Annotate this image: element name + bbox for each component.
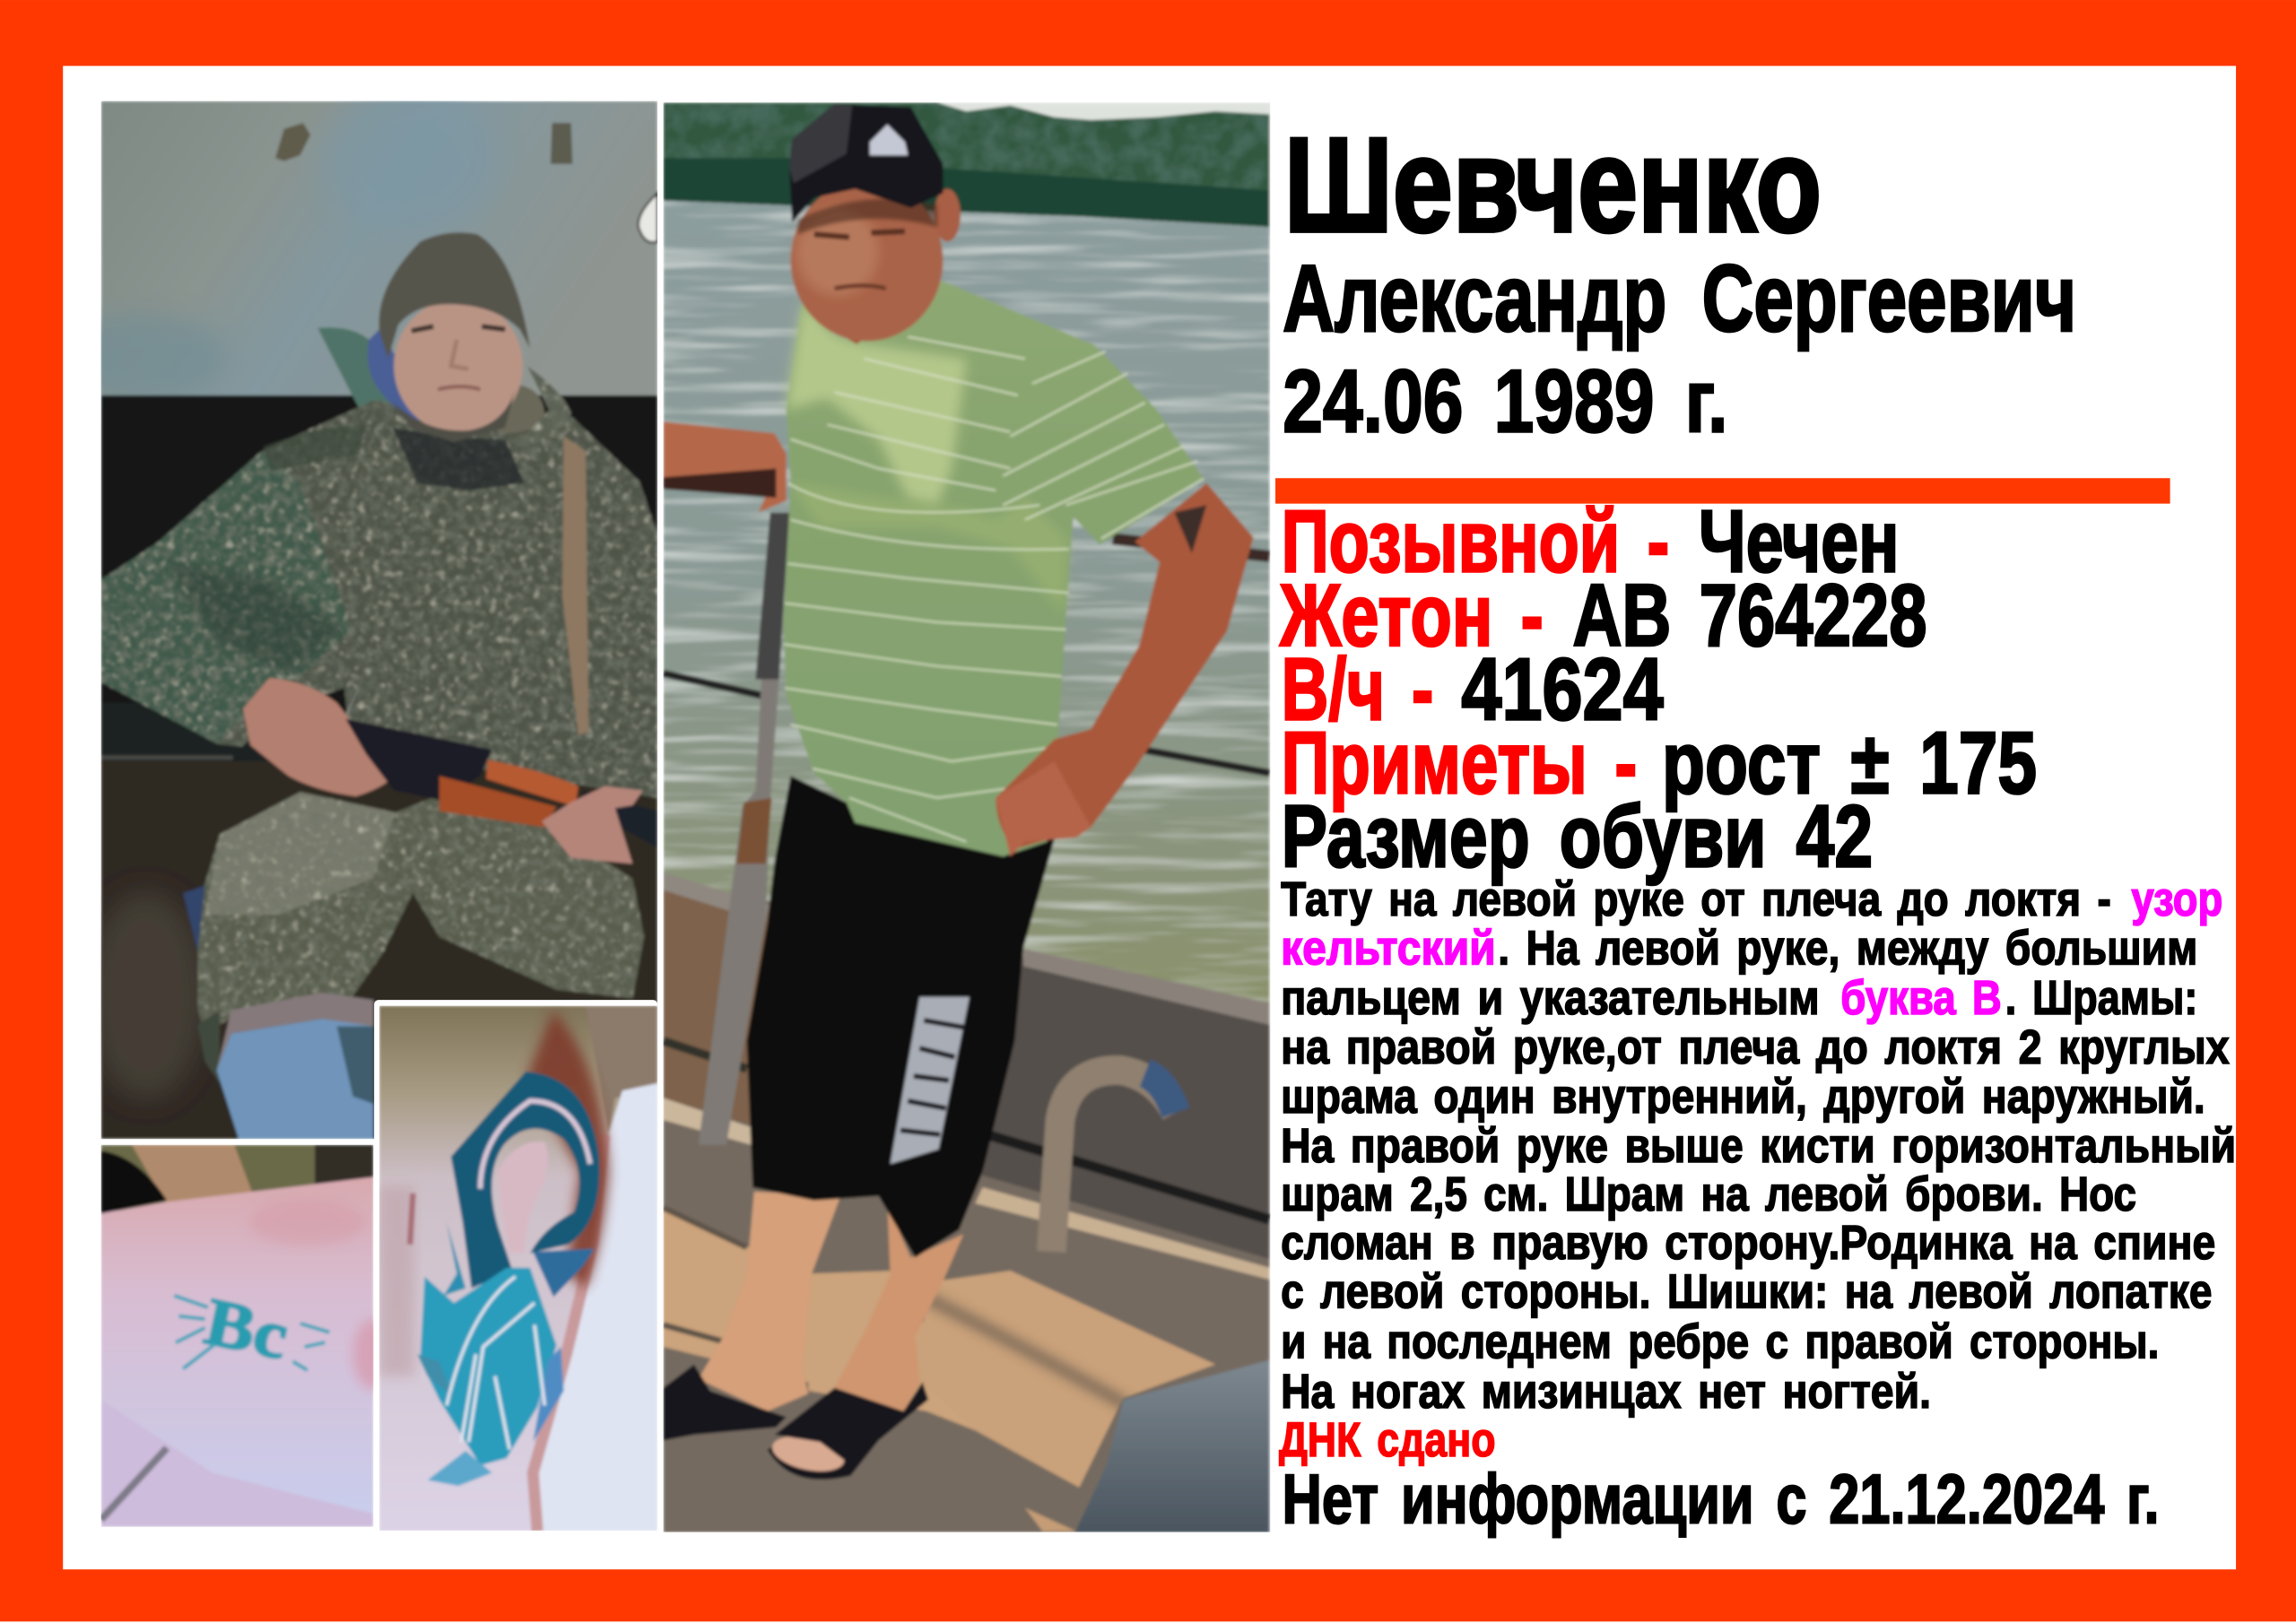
right arm and hand [996,483,1254,849]
details: military unit: В/ч - [1282,640,1433,739]
grey block foreground [1074,1360,1270,1532]
shirt stripes [783,337,1204,842]
sandals [664,1365,787,1441]
shirt [783,281,1204,856]
details: dog tag: АВ 764228 [1572,566,1927,664]
description: tattoos, scars and marks: кельтский [1281,921,1496,975]
deck base [664,879,1270,1532]
description: tattoos, scars and marks: пальцем и указательным [1281,971,1820,1025]
photo: soldier in camouflage with rifle [51,88,657,1139]
description: tattoos, scars and marks: На ногах мизинцах нет ногтей. [1281,1365,1931,1419]
details: features and height: рост ± 175 [1662,713,2037,812]
details: dog tag: Жетон - [1279,566,1544,664]
pipe [1051,1070,1176,1252]
details: shoe size: Размер обуви 42 [1282,787,1873,886]
tattoo letters: Вс [199,1284,294,1374]
details: military unit [1282,640,1664,739]
details: features and height: Приметы - [1282,713,1637,812]
description: tattoos, scars and marks: узор [2131,872,2222,926]
water [664,201,1270,1025]
photo frame: large tattoo [374,1000,657,1532]
note: DNA submitted: ДНК сдано [1279,1413,1496,1467]
post [698,678,779,1146]
details: dog tag [1279,566,1927,664]
date of birth: 24.06 1989 г. [1283,352,1728,452]
photo: man in striped t-shirt on a boat [664,102,1271,1532]
bulwark wall left [664,875,769,1130]
jacket [216,400,657,800]
description: tattoos, scars and marks: Тату на левой руке от плеча до локтя - [1281,872,2111,926]
description: tattoos, scars and marks: . На левой руке, между большим [1498,921,2197,975]
description: tattoos, scars and marks: . Шрамы: [2005,971,2197,1025]
heading: surname: Шевченко [1284,109,1822,260]
bulwark wall right [983,959,1270,1259]
sunlit deck [664,1210,811,1384]
details: call sign: Чечен [1699,492,1900,591]
right hand on rifle [243,678,394,796]
description: tattoos, scars and marks: шрам 2,5 см. Шрам на левой брови. Нос [1281,1167,2136,1221]
tattoo white stripes [447,1277,544,1449]
left arm and handrail [664,421,787,512]
description: tattoos, scars and marks: буква В [1840,971,2002,1025]
left hand [542,786,643,864]
divider bar [1275,478,2170,504]
railings [664,673,761,696]
tree line [664,102,1270,194]
tattoo lower wings [421,1268,556,1465]
tattoo top swirl [451,1072,599,1289]
description: tattoos, scars and marks [1281,872,2236,1419]
boot [217,993,373,1070]
legs [699,1192,840,1411]
cap [789,104,943,222]
shorts print [891,997,970,1164]
details: military unit: 41624 [1461,640,1664,739]
pants [196,796,646,1026]
details: call sign: Позывной - [1282,492,1669,591]
photo: small tattoo on hand, letter B [101,1145,394,1527]
description: tattoos, scars and marks: и на последнем ребре с правой стороны. [1281,1315,2159,1368]
head and neck [831,278,937,344]
rifle [345,719,492,801]
shorts [747,776,1056,1257]
details: features and height [1282,713,2037,812]
sling strap [562,437,588,735]
head [394,299,523,433]
photo: large tribal tattoo on upper arm [379,1006,657,1532]
